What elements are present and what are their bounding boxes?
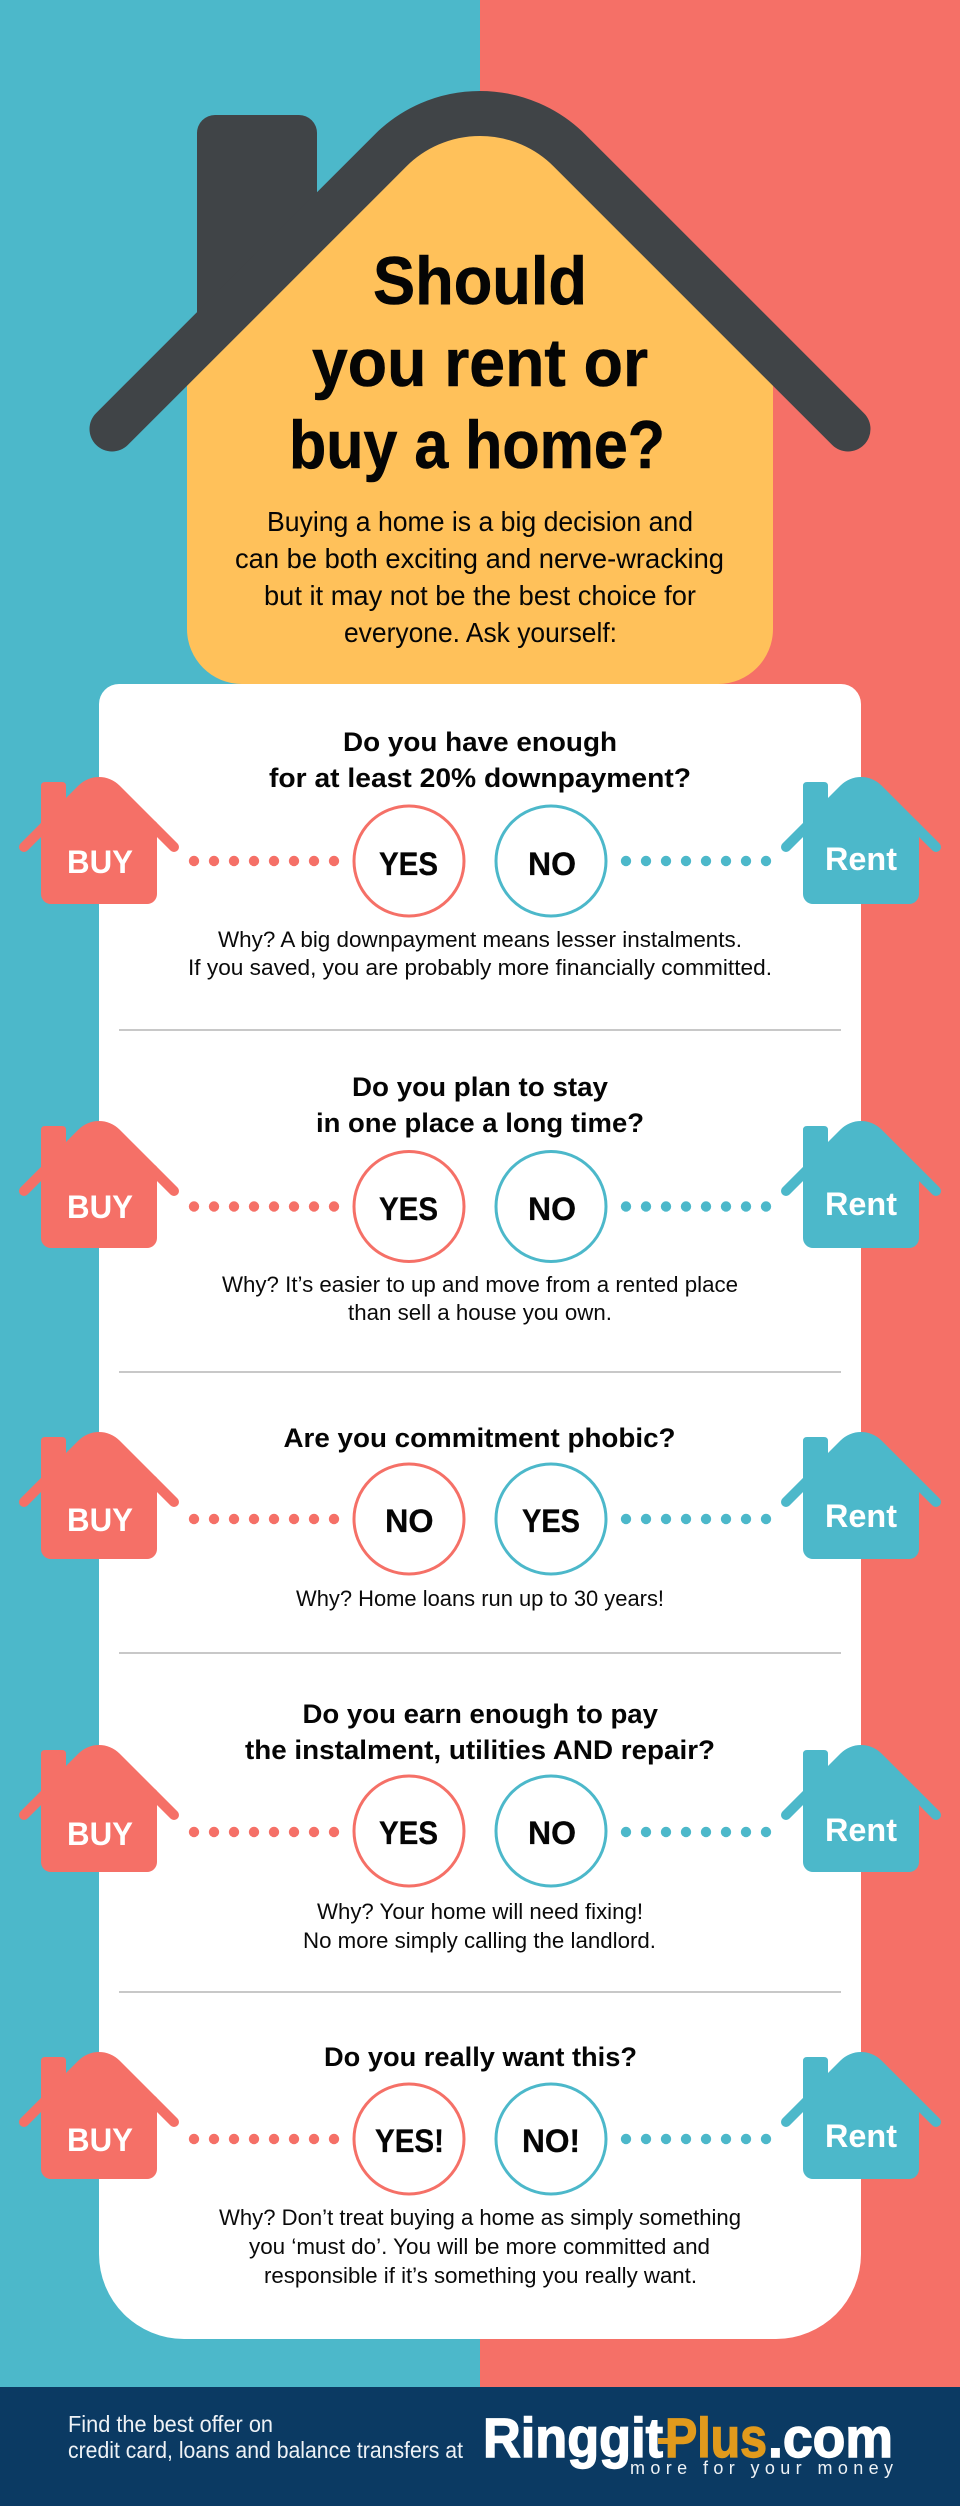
icon: buy house: BUY [67, 1502, 133, 1538]
dotted connector: rent [621, 2134, 771, 2144]
icon: buy house [24, 1745, 174, 1872]
answer circle: yes: YES! [375, 2123, 444, 2159]
icon: rent house: Rent [825, 1498, 897, 1534]
answer circle: yes: YES [379, 1815, 438, 1851]
RinggitPlus logo: Ringgit [483, 2406, 663, 2469]
question 4 heading: the instalment, utilities AND repair? [245, 1735, 715, 1765]
dotted connector: rent [621, 1827, 771, 1837]
icon: rent house [786, 2052, 936, 2179]
answer circle: yes [354, 2084, 464, 2194]
icon: buy house: BUY [67, 844, 133, 880]
intro text [235, 506, 724, 648]
answer circle: no: NO [528, 1191, 576, 1227]
answer circle: yes [354, 1776, 464, 1886]
question 4 heading [245, 1699, 715, 1765]
question 3 heading: Are you commitment phobic? [284, 1423, 676, 1453]
white question card [99, 684, 861, 2339]
question 5 heading: Do you really want this? [324, 2042, 637, 2072]
answer circle: no: NO [385, 1503, 434, 1539]
question 5 explanation [219, 2205, 741, 2288]
question 2 heading: Do you plan to stay [352, 1072, 608, 1102]
intro text: Buying a home is a big decision and [267, 506, 693, 537]
icon: buy house: BUY [67, 1816, 133, 1852]
answer circle: yes [354, 806, 464, 916]
icon: buy house: BUY [67, 2122, 133, 2158]
dotted connector: rent [621, 856, 771, 866]
background: right coral half [480, 0, 960, 2387]
title: you rent or [312, 325, 648, 401]
dotted connector: buy [189, 1201, 339, 1212]
answer circle: yes: YES [522, 1503, 580, 1539]
question 1 explanation: If you saved, you are probably more financially committed. [188, 955, 772, 980]
icon: rent house: Rent [825, 2118, 897, 2154]
RinggitPlus logo [483, 2406, 893, 2478]
footer text: Find the best offer on [68, 2411, 273, 2437]
house roof [112, 113, 848, 429]
answer circle: yes [354, 1152, 464, 1262]
dotted connector: buy [189, 1827, 339, 1837]
icon: buy house: BUY [67, 1189, 133, 1225]
question 5 explanation: Why? Don’t treat buying a home as simply something [219, 2205, 741, 2230]
question 4 explanation: No more simply calling the landlord. [303, 1928, 656, 1953]
question 1 explanation [188, 927, 772, 980]
answer circle: no: NO [528, 1815, 576, 1851]
question 4 explanation [303, 1899, 656, 1953]
question 4 heading: Do you earn enough to pay [302, 1699, 658, 1729]
question 5 row [24, 2042, 936, 2288]
intro text: but it may not be the best choice for [264, 580, 696, 611]
question 4 explanation: Why? Your home will need fixing! [317, 1899, 643, 1924]
question 2 row [24, 1072, 936, 1325]
question 1 explanation: Why? A big downpayment means lesser instalments. [218, 927, 742, 952]
icon: rent house: Rent [825, 1186, 897, 1222]
answer circle: no [496, 1152, 606, 1262]
dotted connector: buy [189, 2134, 339, 2144]
icon: rent house [786, 1432, 936, 1559]
question 3 row [24, 1423, 936, 1611]
answer circle: no: NO [528, 846, 576, 882]
title [289, 243, 665, 483]
dotted connector: buy [189, 856, 339, 866]
intro text: can be both exciting and nerve-wracking [235, 543, 724, 574]
icon: rent house: Rent [825, 841, 897, 877]
question 1 heading: Do you have enough [343, 727, 617, 757]
answer circle: no [496, 2084, 606, 2194]
question 1 row [24, 727, 936, 980]
question 2 explanation [222, 1272, 738, 1325]
icon: buy house [24, 1121, 174, 1248]
question 2 heading: in one place a long time? [316, 1108, 644, 1138]
icon: rent house [786, 777, 936, 904]
icon: buy house [24, 2052, 174, 2179]
RinggitPlus logo: Plus [665, 2406, 767, 2469]
answer circle: yes: YES [379, 846, 438, 882]
icon: buy house [24, 777, 174, 904]
answer circle: yes [496, 1464, 606, 1574]
question 1 heading: for at least 20% downpayment? [269, 763, 691, 793]
dotted connector: rent [621, 1514, 771, 1524]
title: Should [373, 243, 587, 319]
answer circle: yes: YES [379, 1191, 438, 1227]
answer circle: no [496, 1776, 606, 1886]
RinggitPlus logo: more for your money [630, 2458, 893, 2478]
answer circle: no: NO! [522, 2123, 580, 2159]
question 2 explanation: Why? It’s easier to up and move from a rented place [222, 1272, 738, 1297]
question 5 explanation: responsible if it’s something you really want. [264, 2263, 697, 2288]
question 2 explanation: than sell a house you own. [348, 1300, 612, 1325]
question 2 heading [316, 1072, 644, 1138]
footer band [0, 2387, 960, 2506]
RinggitPlus logo: .com [768, 2406, 893, 2469]
background: left teal half [0, 0, 480, 2387]
icon: rent house: Rent [825, 1812, 897, 1848]
footer text [68, 2411, 464, 2463]
title: buy a home? [289, 407, 665, 483]
question 3 explanation: Why? Home loans run up to 30 years! [296, 1586, 664, 1611]
icon: buy house [24, 1432, 174, 1559]
icon: rent house [786, 1121, 936, 1248]
dotted connector: rent [621, 1201, 771, 1212]
house body [187, 113, 773, 684]
intro text: everyone. Ask yourself: [344, 617, 617, 648]
answer circle: no [496, 806, 606, 916]
answer circle: no [354, 1464, 464, 1574]
question 1 heading [269, 727, 691, 793]
question 5 explanation: you ‘must do’. You will be more committed and [249, 2234, 710, 2259]
main house illustration [112, 113, 848, 684]
house chimney [197, 115, 317, 380]
question 4 row [24, 1699, 936, 1953]
icon: rent house [786, 1745, 936, 1872]
dotted connector: buy [189, 1514, 339, 1524]
footer text: credit card, loans and balance transfers at [68, 2437, 464, 2463]
